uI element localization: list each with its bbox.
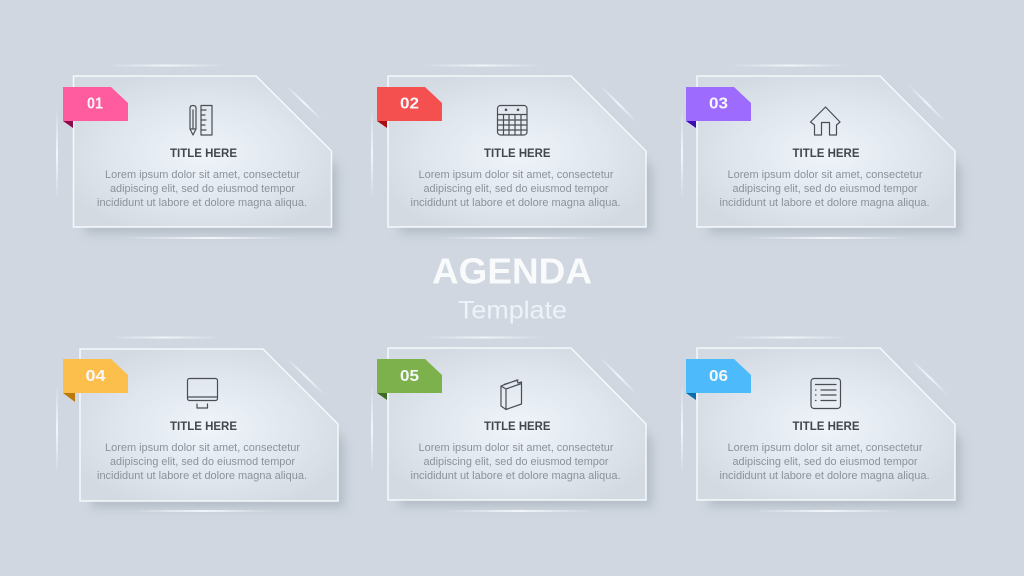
panel: agenda item 02: [371, 64, 652, 239]
title: AGENDA: [432, 250, 592, 292]
number tag 06: 06: [709, 368, 728, 385]
card shape 01: [74, 76, 332, 227]
body text 05: incididunt ut labore et dolore magna aliqua.: [410, 470, 620, 482]
body text 06: adipiscing elit, sed do eiusmod tempor: [732, 456, 918, 468]
body text 04: Lorem ipsum dolor sit amet, consectetur: [105, 442, 300, 454]
body text 01: Lorem ipsum dolor sit amet, consectetur: [105, 169, 300, 181]
panel: agenda item 03: [681, 64, 962, 239]
body text 06: [720, 442, 930, 482]
number tag 01: [63, 87, 128, 128]
body text 02: incididunt ut labore et dolore magna aliqua.: [410, 197, 620, 209]
body text 04: [97, 442, 307, 482]
body text 01: [97, 169, 307, 209]
number tag 05: [377, 359, 442, 400]
panel: agenda item 06: [681, 336, 962, 512]
body text 05: Lorem ipsum dolor sit amet, consectetur: [418, 442, 614, 454]
heading 02: TITLE HERE: [484, 146, 550, 160]
body text 02: Lorem ipsum dolor sit amet, consectetur: [418, 169, 614, 181]
panel: agenda item 05: [371, 336, 652, 512]
number tag 04: [63, 359, 128, 402]
body text 05: [410, 442, 620, 482]
number tag 02: 02: [400, 96, 419, 112]
card shape 05: [388, 348, 646, 500]
number tag 05: 05: [400, 368, 419, 385]
body text 05: adipiscing elit, sed do eiusmod tempor: [424, 456, 609, 468]
body text 02: [410, 169, 620, 209]
body text 01: adipiscing elit, sed do eiusmod tempor: [110, 183, 295, 195]
body text 03: incididunt ut labore et dolore magna aliqua.: [720, 197, 930, 209]
heading 06: TITLE HERE: [792, 419, 860, 433]
panel: agenda item 04: [56, 336, 344, 512]
heading 03: TITLE HERE: [792, 146, 860, 160]
icon: calendar: [498, 106, 527, 135]
icon: book: [501, 380, 522, 410]
panel: agenda item 01: [56, 64, 338, 239]
body text 02: adipiscing elit, sed do eiusmod tempor: [424, 183, 609, 195]
body text 04: incididunt ut labore et dolore magna aliqua.: [97, 470, 307, 482]
heading 04: TITLE HERE: [170, 419, 237, 433]
body text 03: Lorem ipsum dolor sit amet, consectetur: [728, 169, 923, 181]
body text 03: [720, 169, 930, 209]
subtitle: Template: [458, 296, 567, 324]
card shape 03: [697, 76, 955, 227]
body text 04: adipiscing elit, sed do eiusmod tempor: [110, 456, 295, 468]
number tag 06: [686, 359, 751, 400]
icon: list document: [811, 378, 840, 408]
title block: [432, 250, 592, 324]
card shape 04: [80, 349, 338, 501]
number tag 03: 03: [709, 96, 728, 112]
body text 06: Lorem ipsum dolor sit amet, consectetur: [728, 442, 923, 454]
icon: monitor: [188, 378, 218, 408]
body text 01: incididunt ut labore et dolore magna aliqua.: [97, 197, 307, 209]
heading 05: TITLE HERE: [484, 419, 550, 433]
card shape 06: [697, 348, 955, 500]
body text 06: incididunt ut labore et dolore magna aliqua.: [720, 470, 930, 482]
number tag 03: [686, 87, 751, 128]
number tag 01: 01: [87, 96, 103, 112]
number tag 02: [377, 87, 442, 128]
card shape 02: [388, 76, 646, 227]
number tag 04: 04: [86, 368, 106, 385]
icon: house: [810, 107, 840, 135]
icon: pencil and ruler: [190, 106, 212, 135]
body text 03: adipiscing elit, sed do eiusmod tempor: [732, 183, 918, 195]
heading 01: TITLE HERE: [170, 146, 237, 160]
